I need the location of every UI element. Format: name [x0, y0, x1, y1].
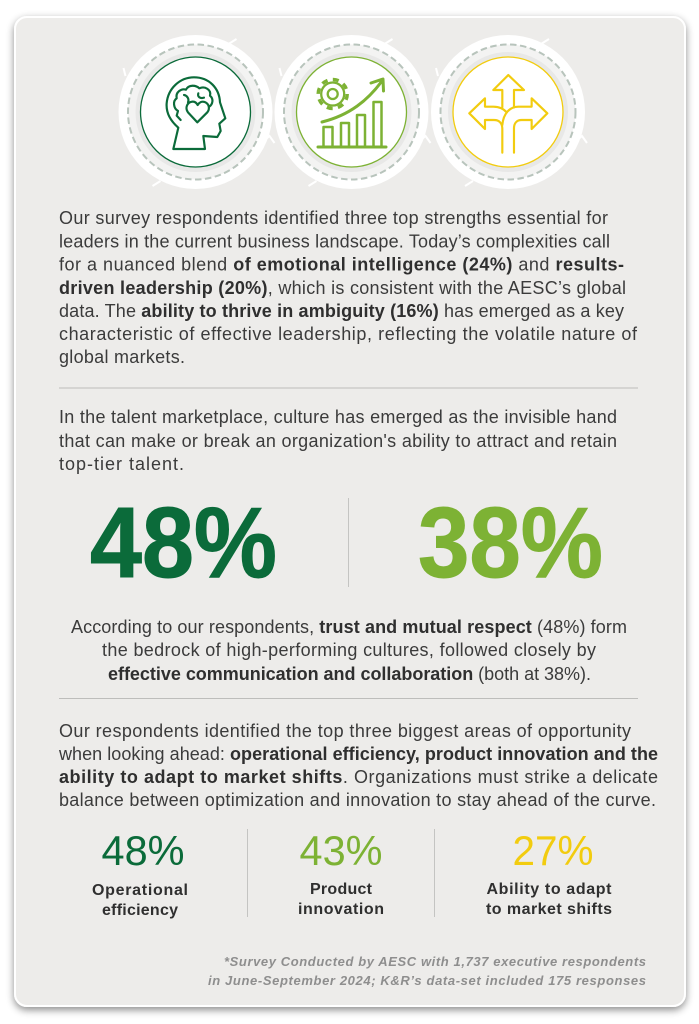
icon: three-way arrows	[431, 35, 587, 189]
big stat: 38%: 38%	[418, 487, 603, 599]
text block: leadership strengths: Our survey respondents identified three top strengths essential for	[59, 208, 608, 228]
stat: ability to adapt: Ability to adapt	[486, 881, 612, 898]
text block: talent marketplace intro: In the talent marketplace, culture has emerged as the invisible hand	[59, 407, 617, 427]
text block: leadership strengths: data. The ability to thrive in ambiguity (16%) has emerged as a key	[59, 301, 624, 321]
footnote	[208, 954, 646, 988]
text block: culture findings: the bedrock of high-performing cultures, followed closely by	[102, 640, 596, 660]
icon: emotional intelligence head	[118, 35, 274, 189]
text block: areas of opportunity	[58, 721, 658, 810]
text block: talent marketplace intro: top-tier talent.	[59, 454, 184, 474]
icon: gear and rising bar chart	[274, 35, 430, 189]
text block: leadership strengths: driven leadership (20%), which is consistent with the AESC’s global	[59, 278, 626, 298]
text block: areas of opportunity: when looking ahead: operational efficiency, product innovation and the	[58, 744, 658, 764]
stat: ability to adapt: 27%	[512, 827, 594, 874]
text block: leadership strengths	[59, 208, 638, 367]
stat: product innovation: innovation	[298, 901, 384, 918]
text block: leadership strengths: leaders in the current business landscape. Today’s complexities call	[59, 232, 610, 252]
text block: leadership strengths: global markets.	[59, 347, 185, 367]
stat: operational efficiency	[92, 827, 188, 919]
stat: operational efficiency: Operational	[92, 882, 188, 899]
stat: product innovation: Product	[310, 881, 373, 898]
stat: operational efficiency: 48%	[102, 827, 184, 874]
stat: product innovation: 43%	[300, 827, 382, 874]
footnote: in June-September 2024; K&R’s data-set included 175 responses	[208, 973, 646, 988]
text block: areas of opportunity: ability to adapt to market shifts. Organizations must strike a delicate	[59, 767, 658, 787]
text block: areas of opportunity: Our respondents identified the top three biggest areas of opportunity	[59, 721, 631, 741]
text block: talent marketplace intro: that can make or break an organization's ability to attract and retain	[59, 431, 617, 451]
text block: areas of opportunity: balance between optimization and innovation to stay ahead of the curve.	[59, 790, 656, 810]
text block: talent marketplace intro	[59, 407, 617, 474]
text block: leadership strengths: characteristic of effective leadership, reflecting the volatile nature of	[59, 324, 638, 344]
text block: leadership strengths: for a nuanced blend of emotional intelligence (24%) and results-	[59, 254, 624, 274]
stat: operational efficiency: efficiency	[102, 902, 178, 919]
text block: culture findings: According to our respondents, trust and mutual respect (48%) form	[71, 617, 627, 637]
text block: culture findings	[71, 617, 627, 684]
big stat: 48%: 48%	[90, 487, 277, 599]
stat: product innovation	[298, 827, 384, 918]
text block: culture findings: effective communication and collaboration (both at 38%).	[108, 664, 591, 684]
footnote: *Survey Conducted by AESC with 1,737 executive respondents	[224, 954, 646, 969]
stat: ability to adapt: to market shifts	[486, 901, 612, 918]
stat: ability to adapt	[486, 827, 612, 918]
